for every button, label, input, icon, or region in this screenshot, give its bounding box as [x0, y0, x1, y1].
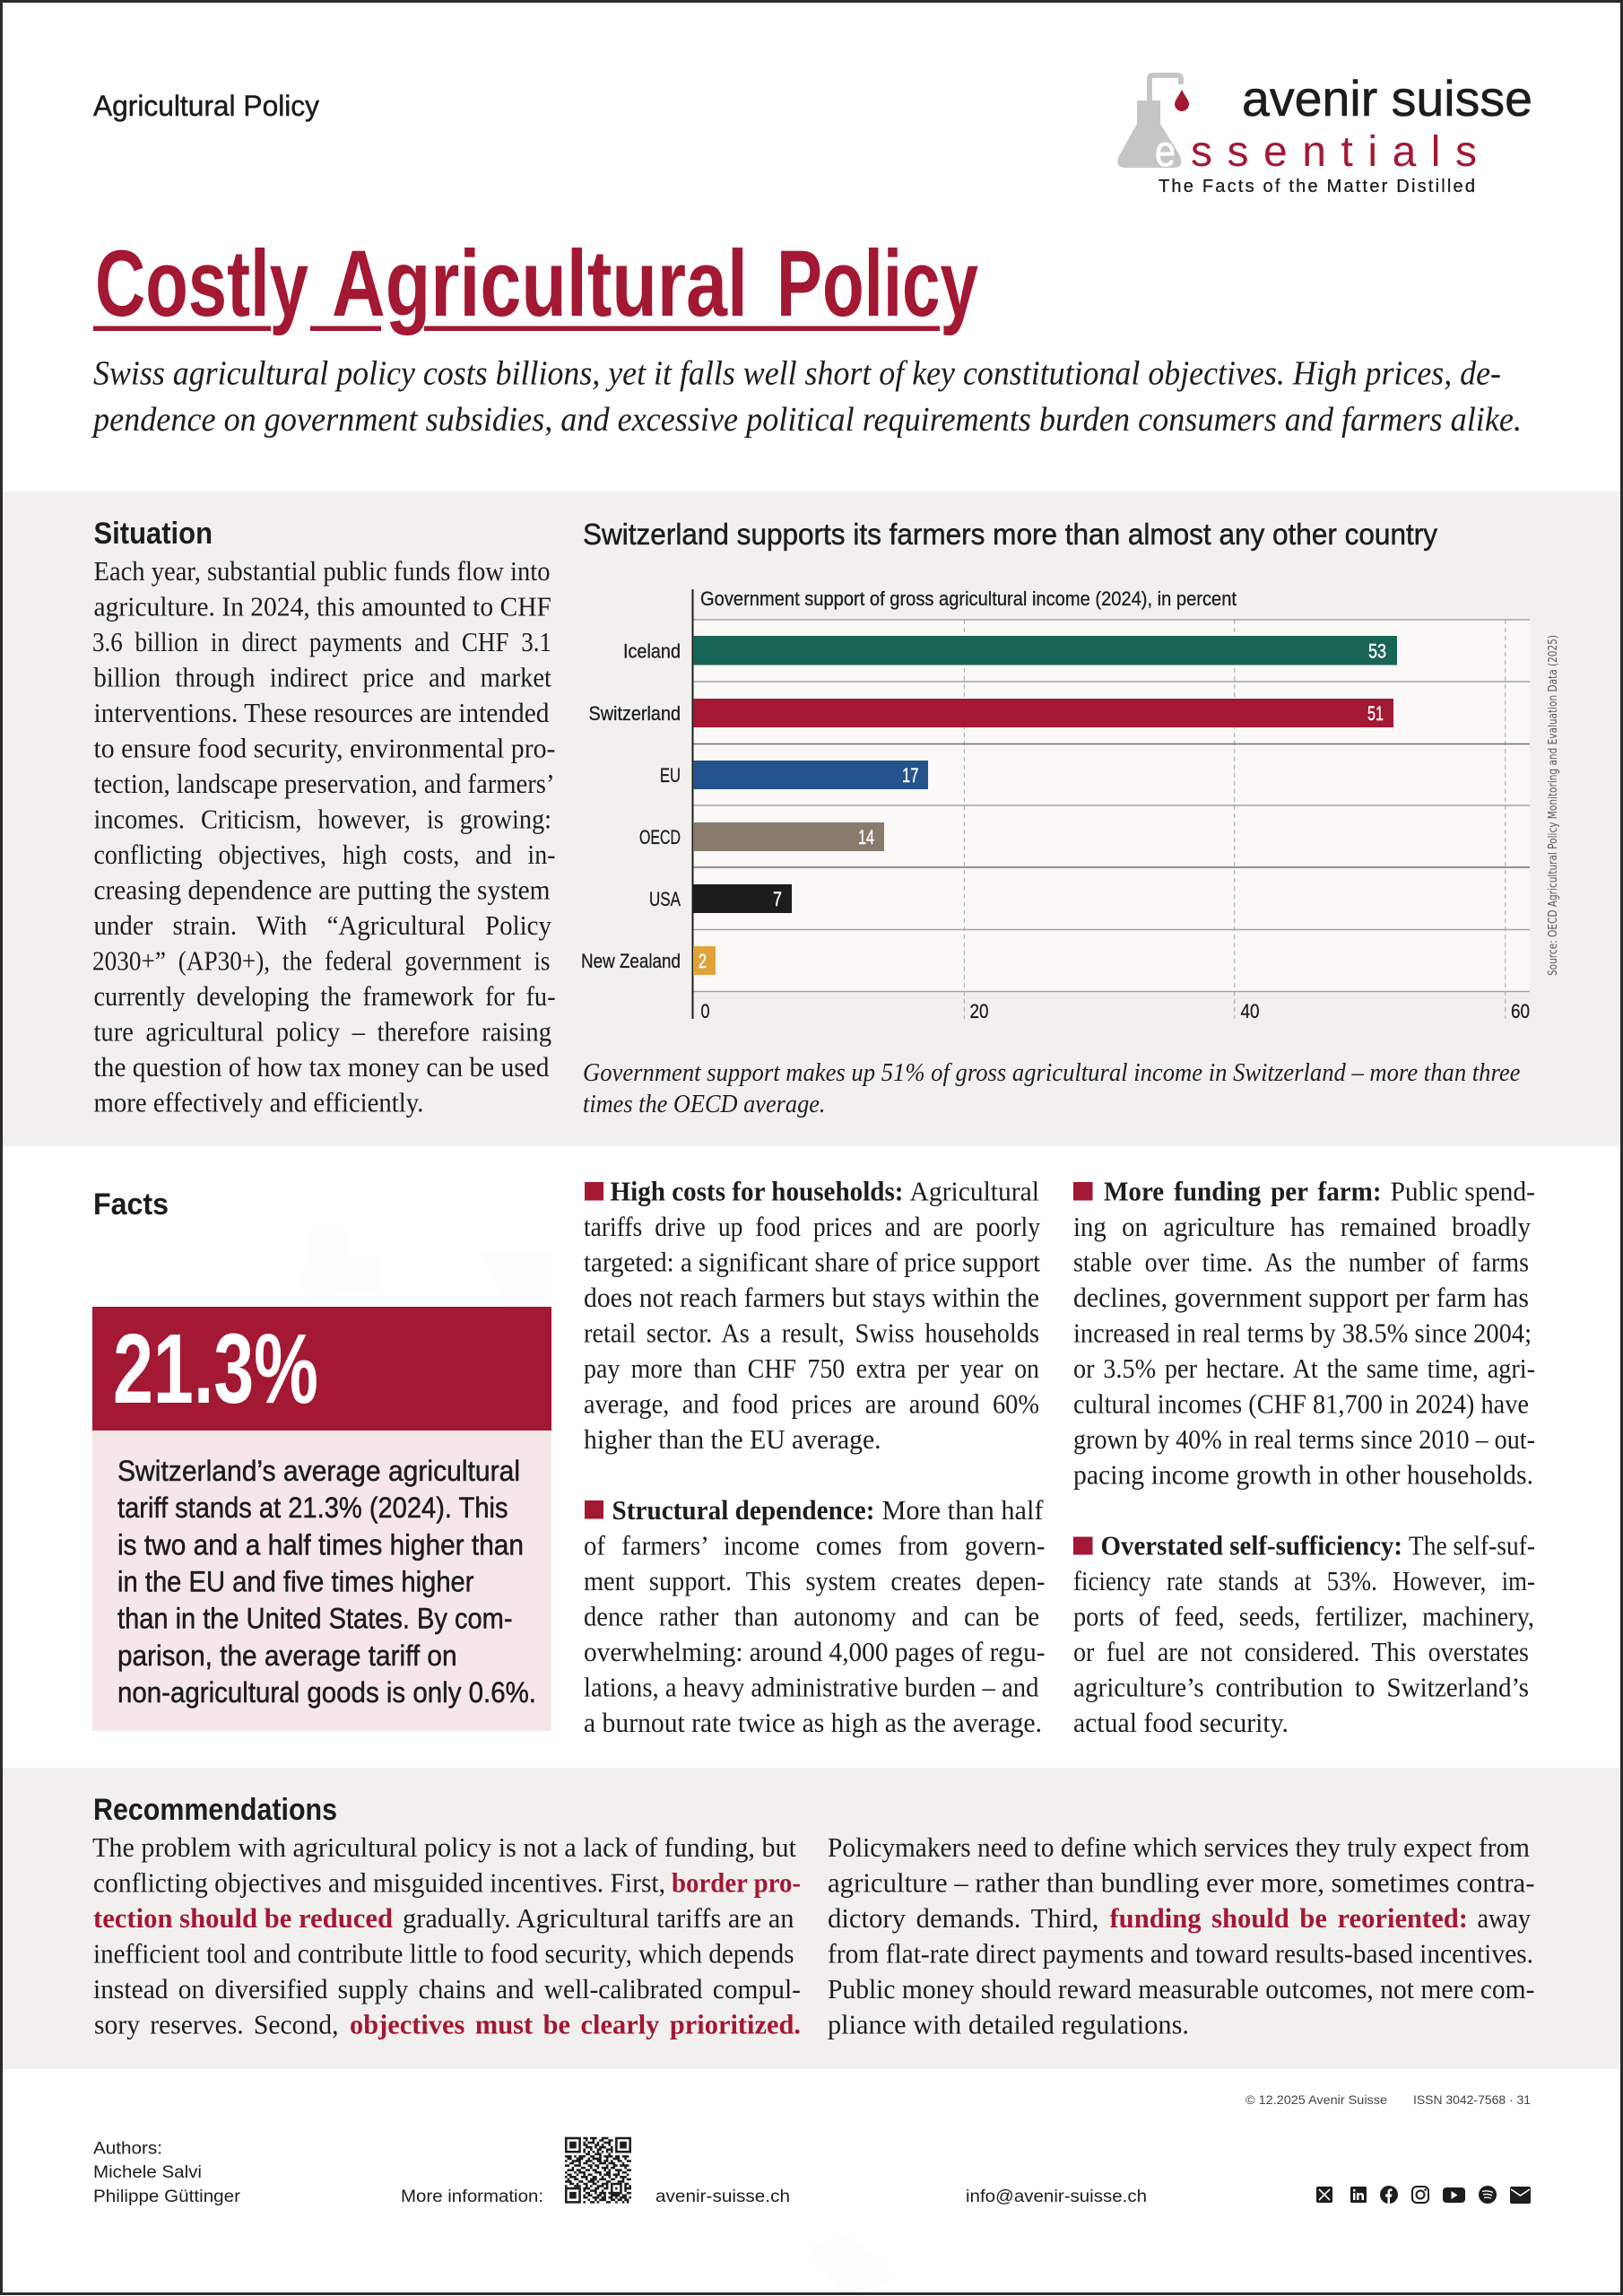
text block: More funding per farm: or 3.5% per hectare. At the same time, agri- — [1073, 1352, 1535, 1384]
callout: tariff text: is two and a half times higher than — [117, 1528, 524, 1561]
text block: situation body: 2030+” (AP30+), the federal government is — [92, 945, 551, 976]
text block: situation body: interventions. These resources are intended — [93, 697, 550, 728]
text block: High costs for households: higher than the EU average. — [584, 1423, 881, 1455]
bar: OECD 14 — [639, 822, 884, 851]
text block: recommendations left column: sory reserves. Second, — [94, 2009, 339, 2039]
logo: avenir suisse essentials: avenir suisse — [1242, 70, 1532, 126]
authors: Philippe Güttinger — [93, 2187, 241, 2206]
callout: big number — [92, 1307, 551, 1431]
icon: Spotify — [1479, 2186, 1497, 2204]
heading: Situation: Situation — [93, 517, 213, 551]
text block: Structural dependence: a burnout rate twice as high as the average. — [584, 1707, 1042, 1738]
title — [93, 231, 978, 336]
text block: More funding per farm: grown by 40% in real terms since 2010 – out- — [1073, 1423, 1535, 1455]
callout: tariff text: than in the United States. By com- — [117, 1602, 513, 1634]
intro text: pendence on government subsidies, and excessive political requirements burden consumers and farmers alike. — [91, 401, 1522, 439]
bar: New Zealand 2 — [581, 946, 716, 975]
panel: situation — [92, 517, 556, 1118]
text block: Overstated self-sufficiency: actual food security. — [1073, 1707, 1289, 1738]
icon: mail — [1510, 2187, 1531, 2204]
text block: More funding per farm: Public spend- — [1390, 1175, 1535, 1207]
text block: More funding per farm: declines, government support per farm has — [1073, 1282, 1529, 1313]
text block: situation body: Each year, substantial public funds flow into — [93, 555, 551, 587]
bar: Switzerland 51 — [588, 699, 1393, 727]
icon: YouTube — [1443, 2187, 1465, 2203]
text block: situation body: more effectively and efficiently. — [93, 1087, 423, 1118]
icon: flask — [1117, 75, 1189, 168]
text block: High costs for households: tariffs drive up food prices and are poorly — [584, 1211, 1040, 1242]
icon: QR code — [565, 2137, 631, 2204]
text block: situation body: 3.6 billion in direct payments and CHF 3.1 — [92, 626, 551, 657]
bar: OECD 14: OECD — [639, 826, 681, 848]
x axis labels: 60 — [1511, 1000, 1530, 1022]
icon: X — [1316, 2187, 1332, 2203]
text block: recommendations right column — [828, 1831, 1535, 2039]
text block: Overstated self-sufficiency: The self-suf- — [1409, 1530, 1535, 1561]
authors: Michele Salvi — [93, 2163, 202, 2182]
text block: Overstated self-sufficiency: or fuel are not considered. This overstates — [1073, 1636, 1529, 1667]
intro text: Swiss agricultural policy costs billions, yet it falls well short of key constitutional objectives. High prices, de- — [93, 355, 1501, 393]
bar: EU 17: EU — [660, 764, 681, 787]
text block: High costs for households — [584, 1175, 1040, 1455]
icon: Facebook — [1380, 2186, 1398, 2204]
bar chart — [581, 587, 1530, 1022]
text block: High costs for households: pay more than CHF 750 extra per year on — [584, 1352, 1039, 1384]
text block: High costs for households: High costs for households: — [610, 1175, 904, 1207]
text block: situation body: creasing dependence are putting the system — [93, 874, 551, 906]
logo: avenir suisse essentials: e — [1155, 128, 1176, 176]
heading: Facts: Facts — [93, 1187, 169, 1222]
x axis labels — [701, 1000, 1530, 1022]
callout: tariff text: in the EU and five times higher — [117, 1566, 474, 1598]
more information label: More information: — [401, 2187, 543, 2206]
faint tractor watermark — [301, 1231, 551, 1305]
copyright and ISSN: ISSN 3042-7568 · 31 — [1413, 2092, 1531, 2107]
text block: More funding per farm: cultural incomes (CHF 81,700 in 2024) have — [1073, 1388, 1529, 1419]
bar: OECD 14: 14 — [858, 826, 874, 848]
chart subtitle: Government support of gross agricultural income (2024), in percent — [700, 587, 1237, 610]
bar: USA 7: 7 — [773, 888, 782, 910]
text block: recommendations right column: from flat-rate direct payments and toward results-based incentives. — [828, 1937, 1533, 1970]
bar: Iceland 53 — [623, 636, 1397, 665]
x axis labels: 40 — [1241, 1000, 1259, 1022]
text block: situation body: to ensure food security, environmental pro- — [93, 732, 556, 764]
text block: More funding per farm: stable over time. As the number of farms — [1073, 1247, 1529, 1277]
heading: chart title: Switzerland supports its farmers more than almost any other country — [583, 517, 1437, 551]
copyright and ISSN: © 12.2025 Avenir Suisse — [1245, 2092, 1387, 2107]
text block: More funding per farm: More funding per farm: — [1104, 1175, 1381, 1207]
text block: recommendations right column: pliance with detailed regulations. — [828, 2009, 1189, 2039]
logo: avenir suisse essentials — [1117, 70, 1532, 196]
text block: recommendations right column: agriculture – rather than bundling ever more, sometimes contra- — [828, 1867, 1535, 1898]
bar: EU 17: 17 — [902, 764, 918, 787]
text block: situation body: billion through indirect price and market — [93, 662, 551, 692]
bar: EU 17 — [660, 761, 928, 789]
text block: recommendations left column: gradually. Agricultural tariffs are an — [403, 1902, 794, 1934]
text block: recommendations left column: instead on diversified supply chains and well-calibrated compul- — [93, 1973, 801, 2005]
chart caption: times the OECD average. — [583, 1091, 825, 1118]
bar: Iceland 53: Iceland — [623, 640, 681, 662]
text block: Overstated self-sufficiency — [1073, 1530, 1535, 1738]
bar: USA 7 — [649, 884, 792, 913]
callout: tariff text: non-agricultural goods is only 0.6%. — [117, 1676, 536, 1709]
text block: situation body: incomes. Criticism, however, is growing: — [93, 804, 551, 834]
bar: Iceland 53: 53 — [1368, 640, 1386, 662]
text block: Structural dependence: overwhelming: around 4,000 pages of regu- — [584, 1636, 1046, 1667]
text block: Structural dependence: dence rather than autonomy and can be — [584, 1600, 1039, 1632]
text block: Structural dependence: ment support. This system creates depen- — [584, 1565, 1046, 1596]
text block: High costs for households: retail sector. As a result, Swiss households — [584, 1317, 1039, 1349]
website: avenir-suisse.ch — [655, 2187, 790, 2206]
callout: tariff text: tariff stands at 21.3% (2024). This — [117, 1492, 508, 1524]
copyright and ISSN — [1245, 2092, 1531, 2107]
text block: High costs for households: does not reach farmers but stays within the — [584, 1282, 1039, 1313]
text block: recommendations left column: objectives must be clearly prioritized. — [350, 2009, 801, 2039]
bar: New Zealand 2: New Zealand — [581, 950, 681, 972]
text block: recommendations right column: away — [1478, 1902, 1531, 1934]
text block: Structural dependence: More than half — [882, 1494, 1044, 1526]
text block: recommendations right column: Public money should reward measurable outcomes, not mere com- — [828, 1973, 1535, 2005]
text block: situation body: the question of how tax money can be used — [93, 1051, 550, 1083]
x axis labels: 20 — [970, 1000, 988, 1022]
callout: big number: 21.3% — [113, 1314, 318, 1424]
panel: recommendations — [92, 1793, 1535, 2039]
text block: situation body — [92, 555, 556, 1118]
logo: avenir suisse essentials: The Facts of the Matter Distilled — [1159, 177, 1475, 196]
faint watermark — [811, 2233, 890, 2292]
bar: New Zealand 2: 2 — [699, 950, 707, 972]
bar: USA 7: USA — [649, 888, 681, 910]
panel: facts — [92, 1187, 551, 1731]
heading: Recommendations: Recommendations — [93, 1793, 337, 1827]
text block: Overstated self-sufficiency: ficiency rate stands at 53%. However, im- — [1073, 1565, 1535, 1596]
title: Agricultural — [332, 231, 748, 336]
intro text — [91, 355, 1522, 439]
text block: High costs for households: Agricultural — [909, 1175, 1039, 1207]
text block: More funding per farm: ing on agriculture has remained broadly — [1073, 1211, 1531, 1242]
text block: Overstated self-sufficiency: Overstated self-sufficiency: — [1101, 1530, 1402, 1561]
text block: situation body: tection, landscape preservation, and farmers’ — [93, 768, 554, 799]
text block: Structural dependence: of farmers’ income comes from govern- — [584, 1530, 1046, 1561]
icons: social media — [1316, 2186, 1531, 2204]
text block: recommendations left column: conflicting objectives and misguided incentives. First, — [93, 1867, 665, 1898]
icon: LinkedIn — [1350, 2187, 1367, 2203]
text block: recommendations right column: dictory demands. Third, — [828, 1902, 1099, 1934]
text block: recommendations left column: inefficient tool and contribute little to food security, which depends — [93, 1937, 794, 1970]
text block: recommendations left column: tection should be reduced — [93, 1902, 393, 1934]
panel: situation and chart background — [0, 491, 1623, 1146]
title: Costly — [95, 231, 308, 336]
text block: situation body: currently developing the framework for fu- — [93, 980, 556, 1012]
email: info@avenir-suisse.ch — [966, 2187, 1147, 2206]
footer — [93, 2092, 1531, 2292]
callout: tariff text: Switzerland’s average agricultural — [117, 1455, 520, 1487]
callout: tariff text: parison, the average tariff on — [117, 1639, 457, 1672]
x axis labels: 0 — [701, 1000, 710, 1022]
callout: tariff text — [92, 1431, 551, 1731]
text block: situation body: agriculture. In 2024, this amounted to CHF — [93, 590, 551, 622]
text block: recommendations left column: The problem with agricultural policy is not a lack of funding, but — [92, 1831, 796, 1863]
panel: recommendations background — [0, 1768, 1623, 2069]
logo: avenir suisse essentials: ssentials — [1191, 128, 1477, 176]
text block: More funding per farm: pacing income growth in other households. — [1073, 1458, 1533, 1491]
chart caption — [583, 1059, 1521, 1118]
panel: chart — [581, 517, 1560, 1118]
text block: situation body: conflicting objectives, high costs, and in- — [93, 839, 556, 870]
text block: More funding per farm — [1073, 1175, 1535, 1491]
text block: High costs for households: targeted: a significant share of price support — [584, 1247, 1040, 1277]
text block: Overstated self-sufficiency: agriculture’s contribution to Switzerland’s — [1073, 1672, 1529, 1702]
text block: Structural dependence: lations, a heavy administrative burden – and — [584, 1672, 1039, 1702]
text block: situation body: ture agricultural policy – therefore raising — [93, 1015, 551, 1048]
text block: Structural dependence: Structural dependence: — [612, 1494, 875, 1526]
text block: recommendations left column: border pro- — [672, 1867, 801, 1898]
text block: recommendations left column — [92, 1831, 801, 2039]
section label: Agricultural Policy: Agricultural Policy — [93, 90, 319, 122]
authors — [93, 2140, 241, 2206]
source note: Source: OECD Agricultural Policy Monitoring and Evaluation Data (2025) — [1547, 635, 1560, 976]
bar: Switzerland 51: Switzerland — [588, 702, 681, 725]
text block: High costs for households: average, and food prices are around 60% — [584, 1388, 1039, 1419]
icon: Instagram — [1412, 2187, 1428, 2203]
text block: More funding per farm: increased in real terms by 38.5% since 2004; — [1073, 1317, 1532, 1349]
text block: situation body: under strain. With “Agricultural Policy — [93, 909, 551, 941]
text block: Structural dependence — [584, 1494, 1046, 1738]
text block: Overstated self-sufficiency: ports of feed, seeds, fertilizer, machinery, — [1073, 1600, 1534, 1632]
text block: recommendations right column: funding should be reoriented: — [1110, 1902, 1468, 1934]
bar: Switzerland 51: 51 — [1367, 702, 1384, 725]
text block: recommendations right column: Policymakers need to define which services they truly expect from — [828, 1831, 1530, 1863]
title: Policy — [777, 231, 978, 336]
authors: Authors: — [93, 2140, 162, 2158]
chart caption: Government support makes up 51% of gross agricultural income in Switzerland – more than three — [583, 1059, 1521, 1087]
